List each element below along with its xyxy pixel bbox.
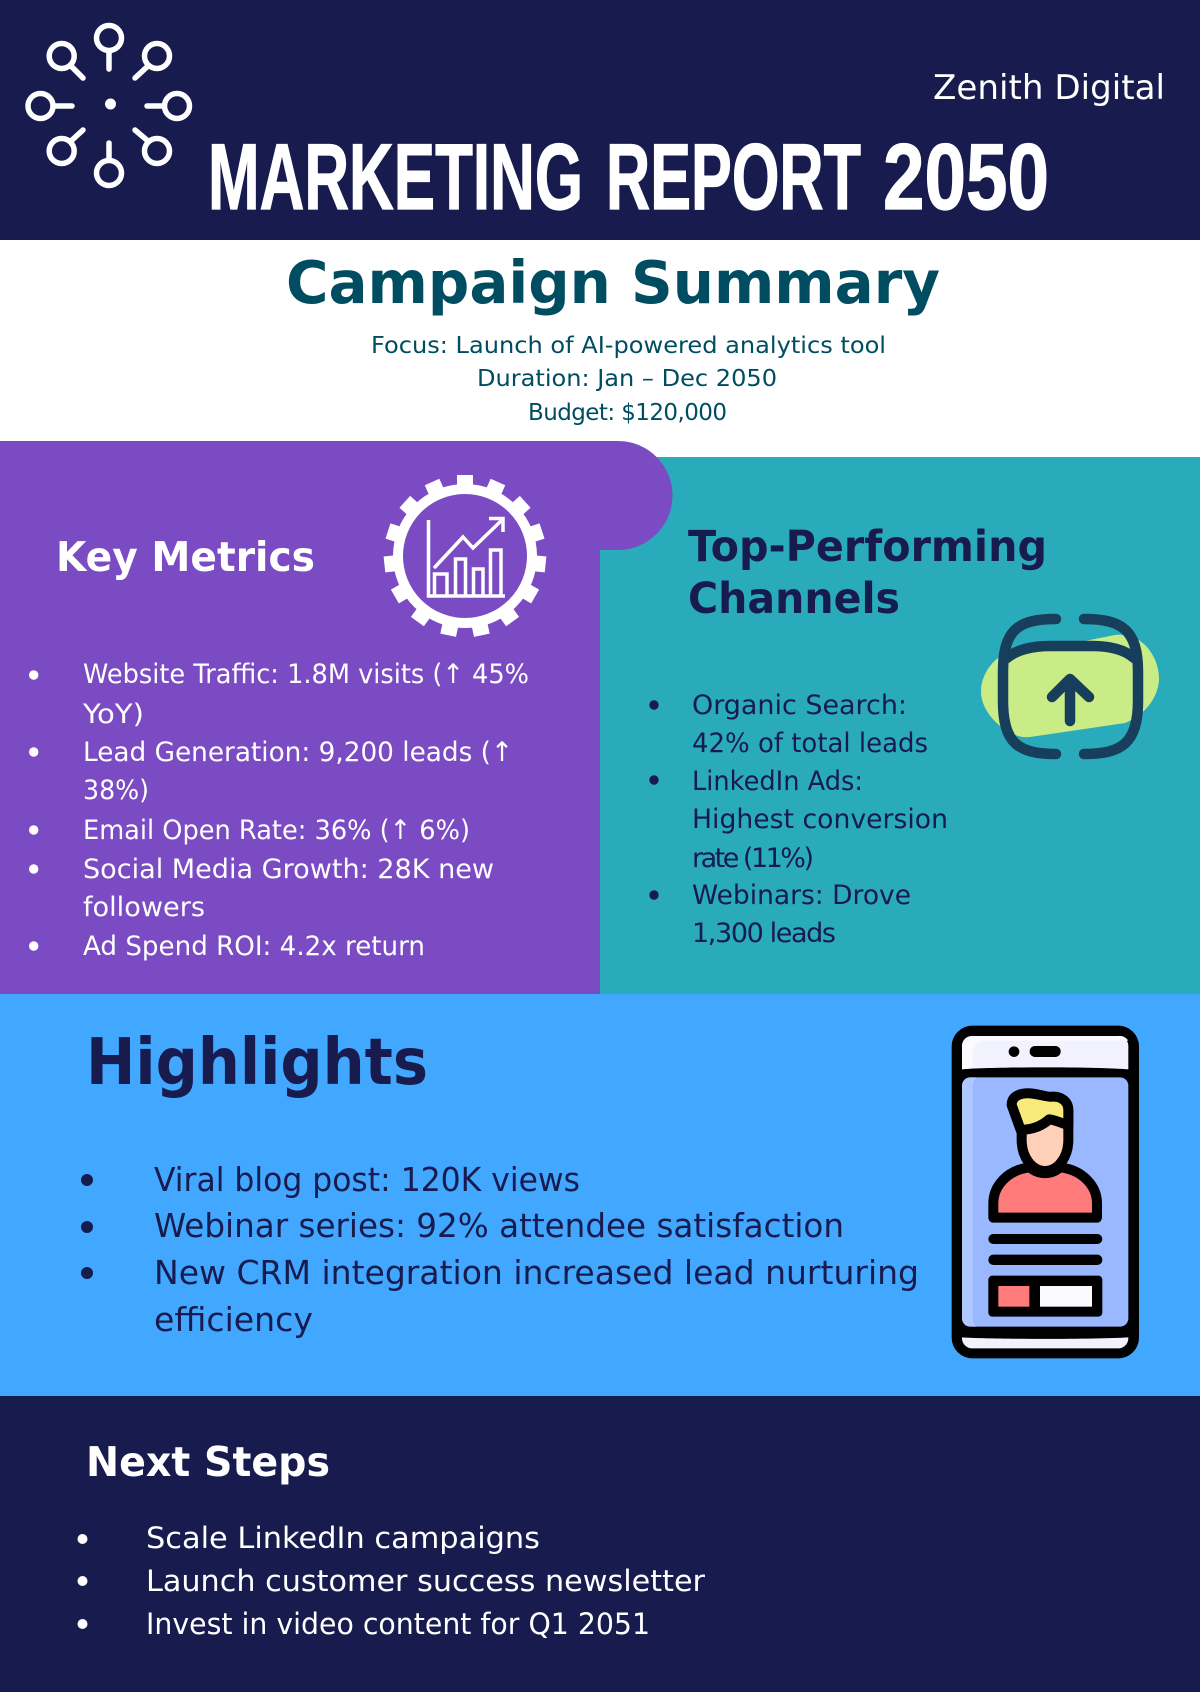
icon: phone with user profile bbox=[952, 1026, 1139, 1358]
list item: organic search: 42% of total leads bbox=[692, 728, 928, 759]
list item: crm integration: New CRM integration increased lead nurturing bbox=[154, 1253, 919, 1292]
list item: webinars: Webinars: Drove bbox=[692, 880, 911, 911]
list item: ad spend roi: Ad Spend ROI: 4.2x return bbox=[83, 931, 425, 962]
heading: campaign summary: Campaign Summary bbox=[286, 248, 940, 317]
title: REPORT bbox=[606, 124, 861, 229]
icon: upload arrow on green blob bbox=[981, 619, 1159, 754]
list item: linkedin ads: Highest conversion bbox=[692, 804, 948, 835]
list item: scale linkedin: Scale LinkedIn campaigns bbox=[146, 1521, 540, 1555]
heading: highlights: Highlights bbox=[86, 1026, 428, 1100]
heading: next steps: Next Steps bbox=[86, 1438, 330, 1486]
list item: launch newsletter: Launch customer success newsletter bbox=[146, 1564, 705, 1598]
title: MARKETING bbox=[208, 124, 583, 229]
panel: next steps bbox=[0, 1396, 1200, 1692]
list item: organic search bbox=[649, 690, 928, 759]
list item: organic search: Organic Search: bbox=[692, 690, 907, 721]
list: channels bbox=[649, 690, 948, 949]
panel: top-performing channels bbox=[600, 457, 1200, 994]
icon: radial magnifier logo bbox=[28, 26, 190, 186]
list item: social media growth bbox=[29, 854, 494, 923]
list item: lead generation: 38%) bbox=[83, 775, 149, 806]
list item: website traffic bbox=[29, 659, 529, 730]
heading: key metrics: Key Metrics bbox=[56, 533, 315, 581]
list item: lead generation: Lead Generation: 9,200 leads (↑ bbox=[83, 737, 513, 768]
list item: crm integration: efficiency bbox=[154, 1300, 313, 1339]
text: duration: Duration: Jan – Dec 2050 bbox=[477, 366, 777, 392]
list item: viral blog post: Viral blog post: 120K views bbox=[154, 1160, 580, 1199]
list item: webinars bbox=[649, 880, 911, 949]
text: focus: Focus: Launch of AI-powered analytics tool bbox=[371, 333, 886, 359]
panel: highlights bbox=[0, 994, 1200, 1396]
list item: linkedin ads bbox=[649, 766, 948, 874]
list: highlights bbox=[81, 1160, 919, 1339]
list item: website traffic: YoY) bbox=[82, 699, 144, 730]
title: 2050 bbox=[883, 124, 1049, 229]
heading: top-performing channels: Top-Performing bbox=[688, 522, 1047, 572]
list item: invest in video: Invest in video content for Q1 2051 bbox=[146, 1607, 650, 1641]
heading: top-performing channels: Channels bbox=[688, 574, 900, 624]
icon: gear with growth chart bbox=[384, 475, 546, 637]
list: next steps bbox=[78, 1521, 705, 1641]
list item: linkedin ads: LinkedIn Ads: bbox=[692, 766, 863, 797]
list item: crm integration bbox=[81, 1253, 919, 1339]
list item: website traffic: Website Traffic: 1.8M visits (↑ 45% bbox=[83, 659, 529, 690]
list item: social media growth: Social Media Growth: 28K new bbox=[83, 854, 494, 885]
list item: webinars: 1,300 leads bbox=[692, 918, 836, 949]
panel: key metrics bbox=[0, 441, 672, 994]
list item: lead generation bbox=[29, 737, 513, 806]
list item: social media growth: followers bbox=[83, 892, 205, 923]
brand name: Zenith Digital bbox=[933, 68, 1165, 108]
list: metrics bbox=[29, 659, 529, 962]
panel: campaign summary bbox=[286, 248, 940, 426]
text: budget: Budget: $120,000 bbox=[528, 400, 727, 426]
list item: webinar series: Webinar series: 92% attendee satisfaction bbox=[154, 1206, 844, 1245]
list item: email open rate: Email Open Rate: 36% (↑ 6%) bbox=[83, 815, 470, 846]
list item: linkedin ads: rate (11%) bbox=[692, 843, 814, 874]
panel: header bbox=[0, 0, 1200, 240]
